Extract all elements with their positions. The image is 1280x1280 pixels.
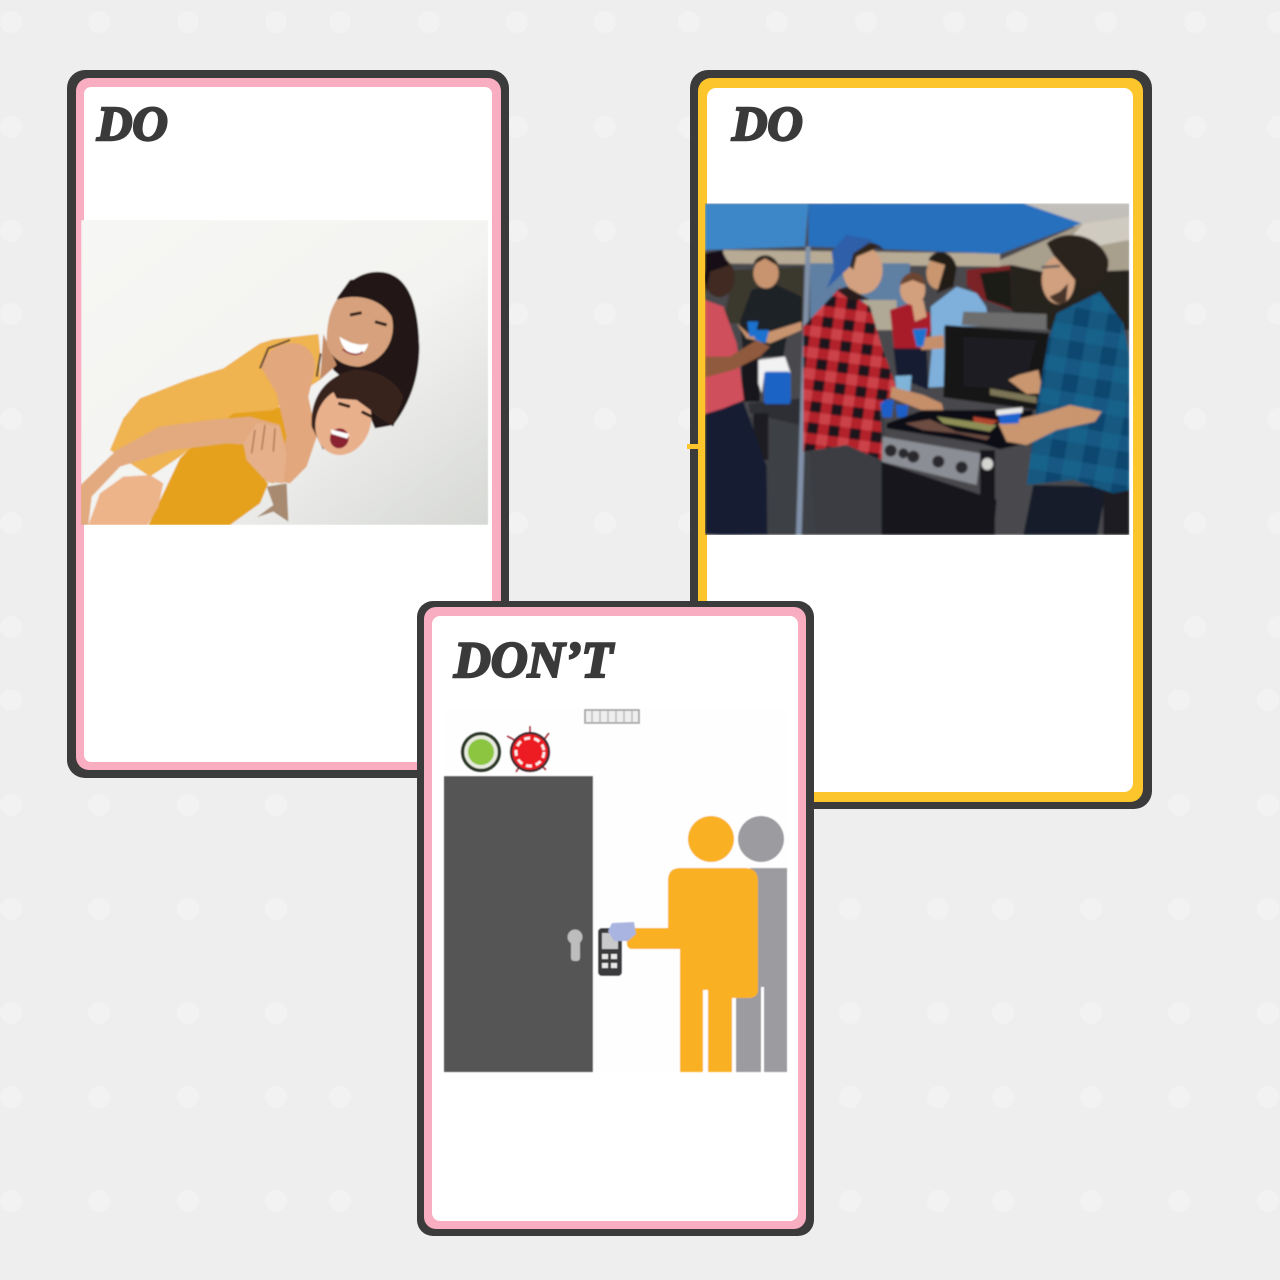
lower woman hair tail — [257, 483, 288, 522]
icon: red indicator — [507, 726, 549, 772]
man in blue plaid shirt — [1027, 292, 1129, 493]
table — [748, 398, 800, 425]
photo: two women piggyback — [81, 220, 488, 525]
man in black shirt — [740, 283, 802, 357]
keypad reader — [598, 928, 622, 976]
upper woman neck — [320, 334, 337, 380]
hand — [243, 423, 287, 483]
grey person behind — [736, 816, 787, 1072]
heading: don't: DON’T — [453, 633, 614, 689]
grill cooking surface — [887, 410, 1033, 449]
upper woman face — [327, 297, 393, 367]
grill body — [882, 462, 997, 535]
man in blue plaid jeans — [1023, 485, 1107, 535]
upper woman dress — [110, 334, 320, 477]
heading: do: DO — [731, 96, 803, 151]
lower woman hair — [312, 370, 403, 450]
heading: do: DO — [96, 96, 168, 151]
cooler — [758, 357, 791, 393]
man in light blue tee — [928, 287, 989, 387]
accent: yellow tick — [687, 444, 700, 449]
back cups — [895, 375, 912, 393]
lower woman face — [314, 391, 373, 456]
sign plate — [585, 710, 639, 723]
child — [893, 347, 928, 390]
access card in hand — [608, 922, 636, 941]
panel: do card, yellow, tailgate party — [687, 70, 1152, 809]
ground — [705, 417, 885, 535]
photo: tailgate grill party — [704, 203, 1129, 535]
tent canopy — [808, 203, 1082, 254]
illustration: two people entering secure door — [444, 708, 787, 1072]
upper woman arm — [262, 343, 317, 483]
right man hand — [1008, 370, 1043, 394]
upper woman thigh — [88, 475, 163, 525]
lower woman dress — [148, 458, 268, 525]
grill lid — [962, 312, 1047, 330]
door handle — [568, 930, 582, 961]
panel: do card, pink, piggyback friends — [67, 70, 509, 778]
icon: green indicator — [462, 734, 500, 770]
upper woman hair — [327, 272, 419, 428]
lower woman arm — [81, 417, 280, 525]
orange person with access card — [627, 816, 758, 1072]
man in pink shirt — [705, 402, 767, 535]
tent pole — [796, 247, 811, 535]
panel: don't card, pink, tailgating at secure door — [417, 601, 814, 1236]
background vehicles — [999, 224, 1130, 273]
blue cups left — [747, 322, 758, 337]
door — [444, 776, 593, 1072]
man in red plaid — [810, 447, 883, 535]
